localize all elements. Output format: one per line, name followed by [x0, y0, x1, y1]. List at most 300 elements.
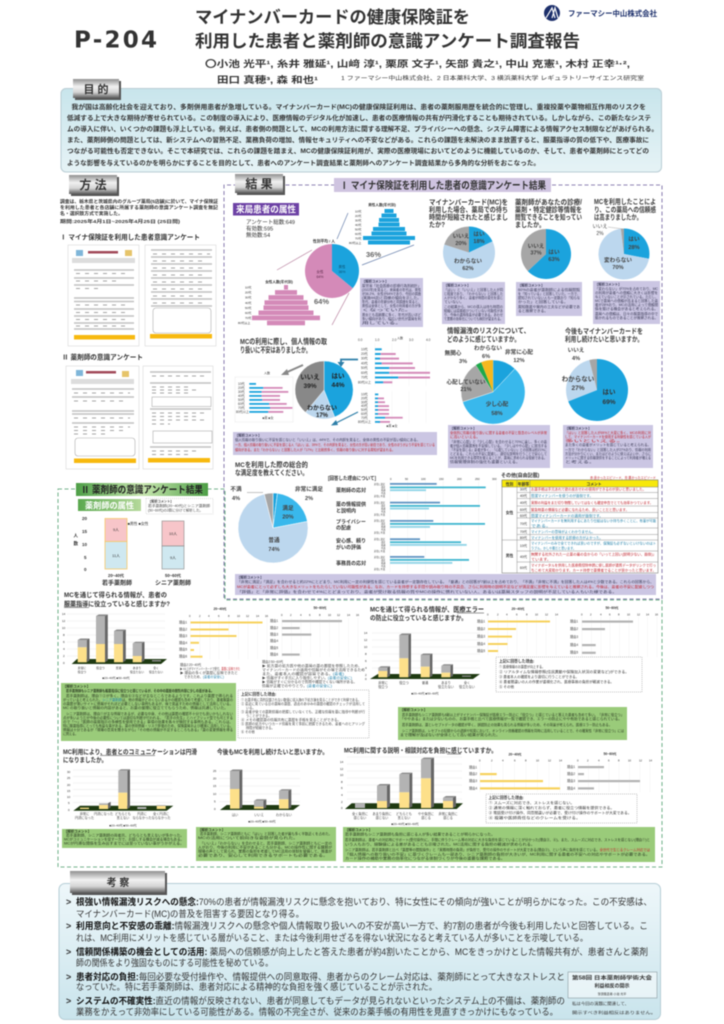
chart: pharmacist gender: 若手薬剤師: [102, 579, 132, 587]
comment: pharmacists continue use: [196, 827, 336, 861]
panel: discussion: [59, 884, 660, 1020]
chart: explanation burden: 8: [341, 780, 343, 784]
comment: continued use: して、マイナンバーカードを使用する利便性を感じている人が: [565, 434, 652, 439]
chart: medical error prevention: [364, 631, 480, 696]
chart: "yes" respondents by age: 3.0: [409, 338, 414, 342]
pie: satisfaction: 20%: [282, 514, 294, 520]
chart: pharmacist gender: 15: [82, 529, 88, 534]
pie: awareness: 63%: [548, 257, 560, 263]
comment: medication guidance: [61, 683, 236, 741]
question: 利用した場合、薬局での待ち: [429, 205, 508, 214]
chart: "yes" respondents by age: 40代: [361, 360, 369, 365]
panel: satisfaction question: [230, 460, 656, 595]
question: ましたか。: [515, 221, 545, 229]
chart: satisfaction by reason: 満足: [381, 522, 386, 526]
question: medical error prevention: の防止に役立っていると感じますか。: [370, 613, 467, 622]
note: 50-60s: ▶ 情報がすぐに分かるので質問や確認でくない場所がある。: [262, 679, 357, 684]
methods text: [60, 198, 218, 225]
chart: patient communication: 非常に: [80, 811, 89, 816]
chart: satisfaction by reason: 薬の情報提供: [336, 501, 366, 508]
chart: pharmacist gender: 10: [82, 542, 88, 547]
reasons box: medication guidance: いる。: [246, 705, 256, 710]
chart: explanation burden: やや負担に: [418, 811, 434, 816]
chart: reasons, medication guidance 50-60s: 理由1: [270, 618, 278, 623]
chart: reasons, medication guidance 50-60s: 0: [281, 613, 283, 617]
heading: methods: [69, 175, 119, 196]
chart: medication guidance usefulness: ■20~40代 ■50~60代: [102, 675, 130, 680]
chart: reasons, burden 20-40s: 4: [502, 758, 504, 762]
chart: reasons, error prevention 20-40s: 理由2: [477, 626, 485, 631]
comment: awareness: 認知されていない人も一定数おり「知らな: [518, 295, 581, 300]
purpose text: ような影響を与えているのかを明らかにすることを目的として、患者へのアンケート調査結果と薬剤師へのアンケート調査結果から多角的な分析をおこなった。: [67, 158, 540, 167]
chart: "yes" respondents by age: [358, 335, 431, 386]
comment: waiting time: じ程度であり、「わからない」と回答した: [444, 291, 503, 296]
pie: information leak: 心配していない: [446, 378, 486, 386]
question: り扱いに不安はありましたか。: [240, 346, 311, 354]
comment: error prevention: シニア薬剤師は、レセプトの記録からの過誤や知見において、オンライン資格確認の情報を同時に活用していることで、その確実性「非常に役立つ」には: [402, 728, 625, 733]
chart: reasons, medication guidance 50-60s: 6: [309, 613, 311, 617]
chart: explanation burden: ■20~40代 ■50~60代: [391, 821, 419, 826]
note: 20-40s: ▶ n以上がマイナンバーカードで受付、薬歴に反映できた: [180, 666, 240, 671]
table: free comments: 緊急時薬の情報など必要になれるため、良いことだと思います。: [531, 507, 629, 512]
heading: pharmacist questionnaire: Ⅱ 薬剤師の意識アンケート: [62, 352, 143, 362]
chart: reasons, burden 20-40s: 20~40代: [509, 752, 522, 756]
chart: reasons, error prevention 50-60s: 理由2: [570, 626, 578, 631]
chart: reasons, medication guidance 20-40s: 14: [256, 614, 260, 618]
bullet: information leak: 根強い情報漏洩リスクへの懸念:70%の患者が情報漏洩リスクに懸念を抱いており、特に女性にその傾向が強いことが明らかになった。この不安感は、: [76, 896, 652, 907]
question: [429, 198, 508, 229]
chart: reasons, medication guidance 20-40s: 理由5: [179, 647, 187, 652]
chart: male population pyramid: [349, 202, 415, 245]
chart: female population pyramid: 70代: [245, 315, 251, 320]
chart: reasons, error prevention 50-60s: 10: [627, 612, 631, 616]
chart: medical error prevention: あまり: [441, 680, 451, 685]
title: [195, 7, 580, 51]
chart: satisfaction by reason: 満足: [381, 540, 386, 544]
chart: medical error prevention: 2: [365, 673, 367, 677]
comment: attributes: 【解析コメント】: [362, 278, 388, 284]
comment: awareness: を「知っている」と回答していた。一方で、: [518, 291, 580, 296]
chart: patient communication: 全く円滑に: [153, 811, 169, 816]
chart: female population pyramid: 50代: [245, 305, 251, 310]
comment: trust: の利用が患者への信頼に大きくは影響を: [595, 290, 658, 295]
chart: reasons, error prevention 50-60s: 14: [646, 612, 650, 616]
pie: gender: 性別平均 / 人: [313, 238, 335, 244]
chart: reasons, error prevention 20-40s: 12: [545, 612, 549, 616]
comment: information leak: 「非常に心配」と「少し心配」を合わせると70%に達し、多くの患: [450, 439, 548, 444]
chart: satisfaction by reason: 事務員の応対: [336, 560, 366, 567]
chart: patient communication: 円滑になった: [94, 811, 113, 816]
chart: satisfaction by reason: 非常に不満: [374, 549, 386, 553]
chart: reasons, medication guidance 50-60s: 理由2: [270, 625, 278, 630]
legend: comment colours: 赤:良かったエピソード、青:悪かったエピソード: [590, 475, 656, 480]
questionnaire thumbnail: pharmacist page 2: [143, 366, 213, 469]
question: pharmacists continue use: 今後もMCを利用し続けたいと思いますか。: [217, 747, 328, 756]
question: たか?: [429, 221, 445, 229]
chart: reasons, error prevention 20-40s: 理由1: [477, 618, 485, 624]
comment: trust: 与えていないことが示されている。ただし、: [595, 294, 658, 299]
reasons box: error prevention: ④ 患者間違いの人の作業が重視化され、医療事故の負担が軽減できる。: [499, 679, 614, 684]
chart: reasons, burden 50-60s: 6: [608, 758, 610, 762]
comment: waiting time: 人がかなり多く、患者が時間の変化を感じ: [444, 295, 503, 300]
heading: purpose: [73, 79, 121, 100]
chart: pharmacists continue use: 5: [214, 800, 216, 804]
methods text: 名・選択肢方式で実施した。: [60, 210, 123, 217]
comment: patient communication: 若手薬剤師、シニア薬剤師の両者共、どちらとも言えないが多かった。: [66, 832, 184, 838]
panel: results frame (pharmacists): [58, 489, 662, 867]
chart: reasons, burden 20-40s: 8: [525, 758, 527, 762]
comment: continued use: また多くの患者がメリットを感じていると考えられる。: [565, 442, 651, 447]
bullet: information leak: [66, 896, 652, 919]
bullet: trust building: >: [66, 947, 71, 957]
respondent counts: 有効数:595: [246, 224, 273, 232]
table: free comments: 女性: [506, 510, 513, 515]
comment: attributes: 男女とも高齢層に多く、年代が高いほど: [362, 312, 422, 317]
bullet: willingness and anxiety: >: [66, 921, 71, 931]
panel: awareness question: [515, 198, 582, 316]
comment: patient communication: MCが円滑な関係を生み出すまでには至っていない事がうかがえる。: [64, 840, 184, 846]
pie: privacy: 17%: [316, 413, 329, 419]
reasons box: medication guidance: ④ メモの確認薬の情報共有に薬歴を手帳を見ることができる。: [241, 717, 341, 722]
pie: satisfaction: 4%: [232, 496, 240, 502]
chart: medication guidance usefulness: 普通: [116, 666, 121, 670]
conflict of interest disclosure: 開示すべき利益相反はありません。: [572, 1009, 656, 1015]
comment: medication guidance: に問える。: [63, 731, 78, 736]
chart: reasons, medication guidance 50-60s: 理由5: [270, 645, 278, 650]
heading: patient survey results: Ⅰ マイナ保険証を利用した患者の意識アンケート結果: [340, 179, 546, 192]
question: は高まりましたか。: [594, 212, 642, 222]
pie: continued use: 69%: [602, 399, 616, 406]
chart: reasons, medication guidance 50-60s: 12: [337, 613, 341, 617]
pie: gender: [277, 213, 414, 325]
chart: medication guidance usefulness: 役立つ: [96, 666, 105, 670]
comment: burden: 若手薬剤師は、患者への対応時にサポート(受付操作)に、手間に伴うクレーム等の対応に大きな負担を感じていることが分かった(理由③、④)。また、スムーズに対応でき、ストレスを感じない(理由①)と: [345, 837, 650, 842]
heading: results: 結 果: [245, 176, 273, 191]
methods text: 期間:2025年4月1日~2025年4月25日 (25日間): [60, 218, 181, 225]
comment: attributes: が36.2%、女性が64%であり、今回の調査: [362, 291, 422, 296]
conflict of interest disclosure: 第58回 日本薬剤師学術大会: [572, 974, 652, 982]
reasons box: medication guidance: [238, 690, 369, 738]
pie: waiting time: いいえ: [453, 233, 470, 240]
heading: patient questionnaire: Ⅰ マイナ保険証を利用した患者意識アンケート: [60, 232, 200, 242]
pie: privacy: わからない: [307, 404, 337, 412]
chart: explanation burden: 14: [340, 760, 344, 764]
chart: male population pyramid: 30代: [355, 218, 361, 222]
chart: satisfaction by reason: 不満: [381, 546, 386, 550]
bullet: patient response burden: [66, 971, 565, 992]
comment: burden: [343, 827, 655, 862]
logo: ファーマシー中山株式会社: [568, 9, 658, 18]
table: free comments: 70代: [520, 521, 528, 526]
chart: reasons, medication guidance 50-60s: 理由3: [270, 632, 278, 636]
pie: continued use: わからない: [562, 374, 595, 383]
pie: privacy: 39%: [303, 383, 317, 390]
chart: reasons, burden 50-60s: 50~60代: [604, 751, 617, 756]
comment: information leak: MCを利用できる環境を整えることが、薬局に求められる役割である。: [450, 455, 547, 460]
chart: satisfaction by reason: 不満: [381, 528, 386, 532]
comment: awareness: かった」と回答している。: [518, 299, 568, 304]
chart: female population pyramid: 60代: [245, 310, 251, 315]
reasons box: medication guidance: 時間が短縮できる。: [246, 725, 275, 730]
authors: 田口 真穂³, 森 和也¹: [217, 74, 318, 85]
poster number: P-204: [74, 28, 157, 54]
chart: "yes" respondents by age: 30代: [361, 356, 369, 361]
chart: pharmacists continue use: はい: [232, 812, 238, 817]
logo: [544, 5, 658, 21]
chart: reasons, medication guidance 20-40s: 20~40代: [214, 606, 227, 611]
comment: waiting time: ていない。: [444, 299, 464, 304]
heading: patient attributes: 来局患者の属性: [236, 204, 296, 214]
table: free comments: 60代: [520, 513, 528, 518]
comment: waiting time: 「はい」と「いいえ」と回答した人が同: [444, 287, 503, 292]
chart: reasons, error prevention 20-40s: 6: [516, 612, 518, 616]
comment: continued use: 方法が分かりにくい、またはどのように使えばよいか、さらに: [565, 451, 651, 456]
chart: male population pyramid: 80代以上: [349, 240, 361, 245]
chart: satisfaction by reason: 非常に不満: [374, 512, 386, 516]
comment: awareness: ると推察できる。: [518, 308, 548, 313]
pie: privacy: 44%: [331, 382, 345, 389]
chart: explanation burden: 非常に負担に: [438, 811, 458, 816]
reasons box: burden: 上記に回答した理由:: [488, 795, 524, 800]
chart: female population pyramid: 40代: [245, 300, 251, 305]
pie: waiting time: はい: [473, 231, 485, 238]
chart: pharmacist gender: [74, 516, 191, 587]
table: free comments: マイナンバーの意味がよくわかりません。: [531, 529, 595, 534]
comment: trust: [593, 281, 660, 324]
chart: female population pyramid: [238, 279, 320, 325]
chart: medication guidance usefulness: 役立つ: [78, 670, 86, 674]
chart: pharmacist gender: 9人: [113, 527, 119, 532]
chart: medical error prevention: 役立たない: [438, 684, 454, 689]
chart: pharmacists continue use: 0: [214, 807, 216, 811]
pie: information leak: 12%: [513, 358, 525, 364]
pie: gender: 36%: [366, 250, 381, 259]
table: free comments: コメント: [586, 481, 602, 486]
question: 薬剤・特定健診等情報を: [515, 205, 582, 214]
chart: explanation burden: 2: [341, 800, 343, 804]
chart: medication guidance usefulness: 12: [62, 619, 66, 623]
chart: patient communication: 円滑になった: [75, 815, 94, 820]
purpose text: 我が国は高齢化社会を迎えており、多剤併用患者が急増している。マイナンバーカード(MC)の健康保険証利用は、患者の薬剤服用歴を統合的に管理し、重複投薬や薬物相互作用のリスクを: [72, 102, 646, 111]
chart: reasons, medication guidance 20-40s: [179, 606, 269, 679]
chart: satisfaction by reason: 非常に不満: [374, 567, 386, 571]
chart: medication guidance usefulness: 8: [63, 633, 65, 637]
pie: satisfaction: 74%: [268, 547, 280, 553]
comment: patient communication: [62, 828, 187, 848]
pie: trust: 変わらない: [604, 256, 632, 264]
chart: reasons, burden 20-40s: 12: [548, 758, 552, 762]
question: [235, 460, 308, 477]
reasons box: error prevention: ⑤ その他: [499, 684, 514, 689]
chart: patient communication: 10: [67, 795, 71, 799]
chart: "don't know" respondents by age: [358, 391, 426, 428]
chart: reasons, medication guidance 50-60s: 4: [300, 613, 302, 617]
chart: satisfaction by reason: 不満: [381, 510, 386, 514]
chart: reasons, burden 50-60s: 2: [587, 758, 589, 762]
chart: reasons, burden 50-60s: 理由4: [567, 786, 575, 790]
note: 50-60s: 理由2:50~60代: [262, 659, 284, 664]
comment: pharmacists continue use: MCの活用について前向きな姿勢が見られた。: [198, 835, 298, 840]
chart: explanation burden: どちらとも: [396, 811, 412, 816]
bullet: system uncertainty: システムの不確実性:直近の情報が反映されない、患者が同意してもデータが見られないといったシステム上の不備は、薬剤師の: [76, 995, 565, 1006]
chart: reasons, medication guidance 50-60s: 8: [319, 613, 321, 617]
table: free comments: ています。: [531, 556, 551, 562]
chart: reasons, medication guidance 50-60s: 50~60代: [314, 605, 327, 610]
comment: awareness: 周知徹底や案内の工夫などが必要であ: [518, 304, 580, 309]
comment: burden: シニア薬剤師は、若手薬剤師と比べ「薬歴等の閲覧操作」と「実務時間の負荷」が負担で、受付の操作のサポートが大変である(理由③)、という声に負担を感じている。全世代で生じるクレーム対応では: [345, 847, 651, 852]
authors: 1 ファーマシー中山株式会社、2 日本薬科大学、3 横浜薬科大学 レギュラトリーサイエンス研究室: [341, 74, 644, 82]
chart: medication guidance usefulness: [62, 612, 167, 680]
chart: reasons, error prevention 50-60s: 6: [609, 612, 611, 616]
pie: satisfaction: 満足: [282, 504, 294, 512]
chart: reasons, error prevention 20-40s: 2: [497, 612, 499, 616]
note: 50-60s: ▶ 処方薬の処方医や他の薬局の薬の履歴を参照したため、: [262, 663, 362, 668]
chart: satisfaction by reason: 不満: [381, 491, 386, 495]
chart: reasons, burden 20-40s: 6: [514, 758, 516, 762]
chart: medical error prevention: ■20~40代 ■50~60代: [411, 690, 439, 696]
chart: "no" respondents by age: ■男 ■女: [262, 415, 274, 420]
chart: reasons, error prevention 50-60s: 4: [600, 612, 602, 616]
chart: "yes" respondents by age: 60代: [361, 370, 369, 375]
question: 情報漏洩のリスクについて、: [447, 326, 530, 335]
heading: free comments: その他(自由記載): [501, 472, 540, 479]
conflict of interest disclosure: 筆頭発表者:小池 光平: [598, 991, 626, 996]
comment: continued use: [563, 425, 653, 468]
pie: information leak: 21%: [460, 387, 472, 393]
table: free comments: 簡潔マイナンバーカードの適用が面倒です。: [531, 513, 603, 518]
pie: trust: いいえ: [592, 224, 608, 230]
question: [515, 198, 582, 229]
comment: privacy: [233, 432, 437, 455]
bullet: information leak: >: [66, 897, 71, 907]
chart: pharmacist gender: ■男性 ■女性: [128, 521, 149, 526]
chart: medical error prevention: 6: [365, 659, 367, 663]
question: medication guidance: MCを通じて得られる情報が、患者の: [64, 590, 167, 599]
comment: information leak: に高いといえる。: [450, 434, 480, 439]
bullet: patient response burden: >: [66, 972, 71, 982]
reasons box: error prevention: ③ 患者本人の確認をより適切に行うことができる。: [499, 674, 579, 679]
table: free comments: [502, 480, 658, 573]
bullet: willingness and anxiety: [66, 920, 648, 943]
comment: trust: 築かれるものであることが推察される。: [595, 315, 658, 320]
chart: patient communication: ならなかった: [151, 815, 171, 820]
chart: reasons, burden 50-60s: 4: [598, 758, 600, 762]
pie: waiting time: 18%: [473, 239, 485, 245]
chart: pharmacist gender: シニア薬剤師: [155, 579, 191, 587]
pie: trust: 70%: [612, 265, 624, 271]
chart: pharmacists continue use: 15: [213, 784, 217, 788]
chart: pharmacist gender: 5: [84, 555, 87, 560]
pie: gender: 男性: [338, 264, 346, 269]
note: 50-60s: ▶ 情報がすぐ手元に入り指導しやすい。 (患者の安全に): [262, 675, 352, 680]
chart: pharmacists continue use: いいえ: [254, 812, 264, 817]
chart: medical error prevention: 12: [364, 638, 368, 642]
question: patient communication: になりましたか。: [63, 755, 107, 764]
chart: reasons, burden 20-40s: 理由2: [469, 771, 477, 776]
chart: reasons, medication guidance 20-40s: 6: [218, 614, 220, 618]
chart: reasons, medication guidance 50-60s: 2: [290, 613, 292, 617]
chart: reasons, medication guidance 20-40s: 8: [228, 614, 230, 618]
chart: satisfaction by reason: 不満: [381, 564, 386, 568]
chart: reasons, error prevention 50-60s: 理由4: [570, 642, 578, 647]
table: free comments: 男性: [506, 553, 513, 558]
chart: explanation burden: 全く負担に: [352, 811, 368, 816]
chart: pharmacist gender: 11人: [112, 553, 120, 558]
chart: reasons, burden 50-60s: 理由1: [567, 764, 575, 769]
heading: pharmacist attributes: 薬剤師の属性: [85, 500, 134, 510]
chart: pharmacists continue use: 20: [213, 776, 217, 780]
table: free comments: 実際の利益をまだ切り物間していてはなくも確定申告でとても効率かつています。: [531, 500, 653, 505]
pie: information leak: 3%: [459, 359, 467, 365]
chart: medical error prevention: 非常に: [378, 680, 388, 685]
table: free comments: 30代: [520, 486, 528, 492]
table: free comments: 40代: [520, 554, 528, 559]
chart: explanation burden: 0: [341, 806, 343, 810]
chart: "no" respondents by age: 10代: [238, 381, 246, 386]
title: マイナンバーカードの健康保険証を: [195, 7, 470, 27]
table: free comments: 40代: [520, 493, 528, 498]
comment: waiting time: [442, 282, 505, 324]
chart: explanation burden: 4: [341, 793, 343, 797]
chart: "no" respondents by age: 30代: [238, 389, 246, 394]
panel: continued use question: [562, 326, 653, 468]
chart: satisfaction by reason: 300: [492, 477, 497, 481]
chart: satisfaction by reason: 非常に満足: [374, 482, 386, 486]
chart: reasons, error prevention 50-60s: 理由1: [570, 618, 578, 624]
respondent counts: アンケート総数:649: [246, 218, 295, 226]
comment: awareness: [516, 282, 582, 316]
question: patient communication: MC利用により、患者とのコミュニケーションは円滑: [63, 747, 197, 756]
table: free comments: 60代: [520, 507, 528, 512]
comment: pharmacists continue use: 【解析コメント】: [198, 827, 225, 832]
arrow: to upper right chart: [338, 360, 358, 367]
note: 50-60s: また、患者本人の確認が容易である。 (患者): [262, 671, 344, 676]
comment: satisfaction: 「非常に満足」「満足」を合わせると約22%にとどまり、MC利用に一定の利便性を感じている患者が一定数存在している。「普通」との回答が7割以上を占めており、「不満」「非常に不満」を回答した人は4%と少数である。これらの回答から、: [237, 579, 654, 584]
comment: information leak: 【解析コメント】: [450, 426, 476, 430]
chart: reasons, error prevention 50-60s: 16: [655, 612, 659, 616]
bullet: system uncertainty: [66, 995, 565, 1017]
chart: pharmacist gender: 人: [74, 533, 78, 538]
comment: waiting time: て業務の効率化についても検討が望まれる。: [444, 316, 503, 321]
comment: continued use: 【解析コメント】: [565, 426, 591, 430]
comment: waiting time: この結果から、MCの導入は待ち時間の: [444, 304, 503, 309]
chart: satisfaction by reason: 非常に満足: [374, 537, 386, 541]
chart: explanation burden: 感じない: [354, 815, 366, 820]
arrow: to lower right chart: [331, 412, 358, 426]
chart: reasons, error prevention 50-60s: [570, 605, 659, 657]
chart: "don't know" respondents by age: 60代: [361, 411, 369, 416]
table: free comments: 性別: [506, 481, 513, 486]
chart: reasons, burden 20-40s: 2: [491, 758, 493, 762]
chart: satisfaction by reason: 満足: [381, 558, 386, 562]
chart: "yes" respondents by age: 0.0: [358, 338, 363, 342]
pie: satisfaction: 2%: [305, 496, 313, 502]
pie: trust: [592, 224, 649, 280]
pie: continued use: いいえ: [568, 347, 585, 354]
note: 50-60s: マイナンバーカードの適用や情報がその場で活用できるため: [262, 667, 365, 672]
chart: male population pyramid: 男性人数(年代別): [368, 202, 397, 207]
chart: reasons, error prevention 20-40s: 理由5: [477, 648, 485, 653]
chart: reasons, medication guidance 20-40s: 理由1: [179, 620, 187, 624]
comment: satisfaction: MCが患者にとって必ずしも大きなメリットをもたらしていない可能性がある。なお、カードを持参する手間や読み取り時の不具合、さらに利用時の説明不足などが満足度に影響を与えていると推察される。今後は、患者の不安に配慮しつつ: [237, 584, 654, 589]
comment: error prevention: まで理解が及ばないが全体として高い結果が見られた。: [400, 732, 500, 737]
reasons box: medication guidance: ② 直近に見ている日の薬局の薬歴、過去のあゆみの薬歴の確認のチェックが活用して: [241, 701, 365, 706]
chart: pharmacist gender: 10人: [169, 531, 177, 536]
comment: medication guidance: 若手薬剤師は、理由①②が多く、理由⑥③などが主なところであるようです。これより薬歴で得られる: [66, 693, 233, 698]
pie: information leak: わからない: [474, 344, 502, 352]
question: どのように感じていますか。: [447, 334, 520, 344]
reasons box: medication guidance: ⑤ 医師の処方やいつカード情報を見て事前に把握できるため、患者へのヒアリング: [241, 721, 366, 726]
